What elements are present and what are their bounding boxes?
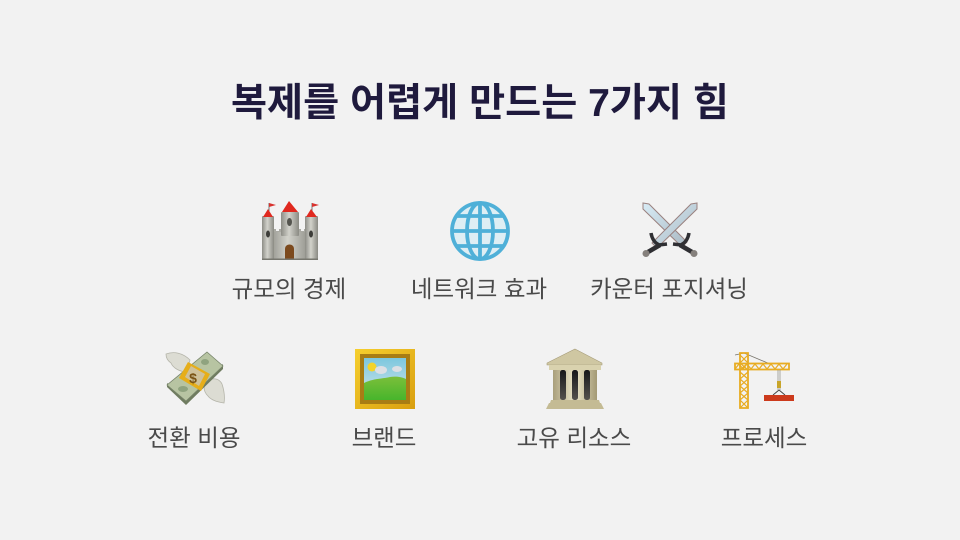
label: 전환 비용 [147,425,241,451]
icon: money with wings: $ [189,370,197,386]
item: 카운터 포지셔닝 [590,203,748,302]
label: 카운터 포지셔닝 [590,276,748,302]
label: 규모의 경제 [232,276,346,302]
label: 프로세스 [721,425,807,451]
label: 브랜드 [352,425,416,451]
label: 네트워크 효과 [411,276,547,302]
title: 복제를 어렵게 만드는 7가지 힘 [231,82,729,125]
item: 고유 리소스 [517,349,631,451]
icon: construction crane [735,353,794,408]
item: 규모의 경제 [232,201,346,302]
icon: crossed swords [642,203,698,257]
icon: castle [262,201,319,260]
item: 네트워크 효과 [411,203,547,302]
icon: framed picture [355,349,415,409]
icon: globe [452,203,508,259]
item: 브랜드 [352,349,416,451]
label: 고유 리소스 [517,425,631,451]
icon: classical building [546,349,604,409]
item: 전환 비용 [147,352,241,451]
item: 프로세스 [721,353,807,451]
